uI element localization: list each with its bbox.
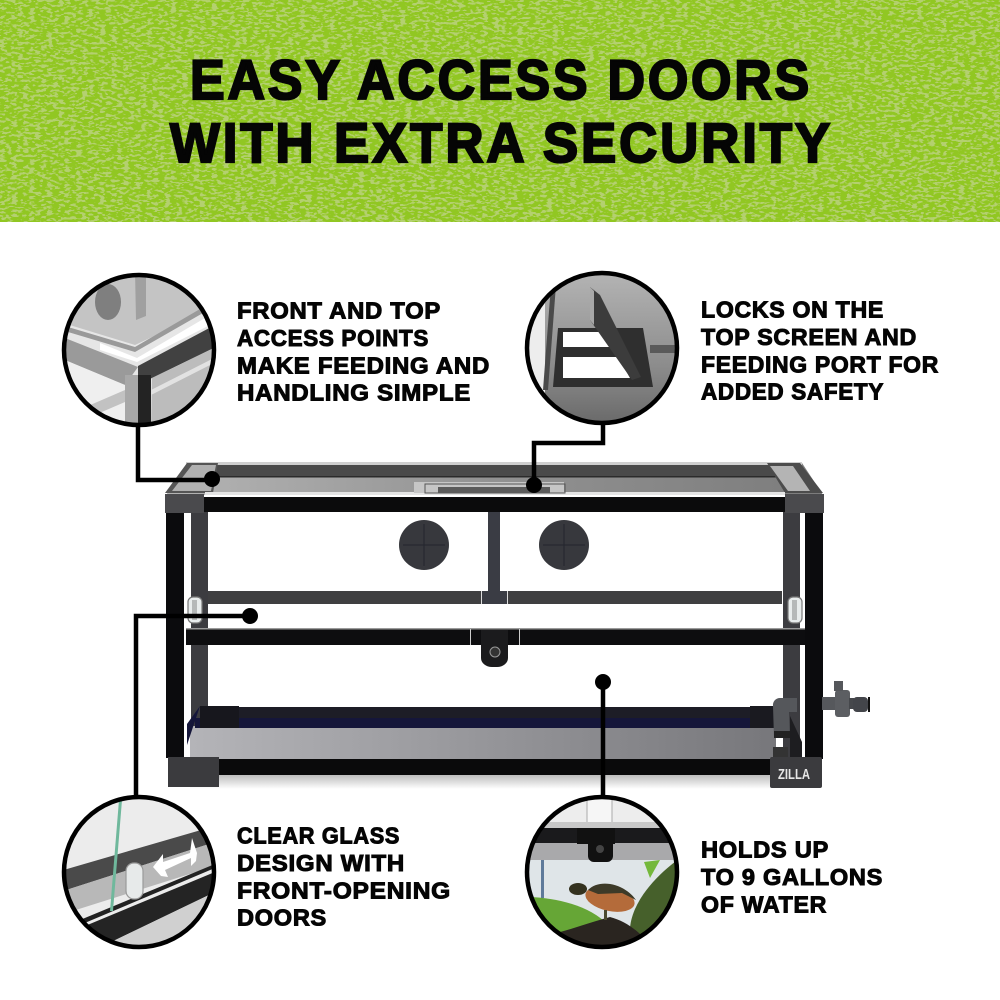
title: EASY ACCESS DOORS: [190, 48, 812, 111]
vent discs: [399, 520, 449, 570]
leader line: top access: [138, 425, 220, 487]
text block: locks: FEEDING PORT FOR: [701, 352, 939, 378]
middle front bar: [186, 629, 806, 645]
bottom front bar: [219, 759, 771, 775]
glass floor: [190, 726, 776, 760]
text block: locks: [701, 296, 939, 404]
title: WITH EXTRA SECURITY: [170, 111, 833, 174]
turtle: [569, 882, 637, 920]
feeding port: [414, 482, 565, 493]
detail circle: turtle in water: [525, 795, 680, 950]
bottom left corner: [168, 757, 219, 787]
leader line: locks: [526, 425, 603, 493]
text block: front and top access: FRONT AND TOP: [237, 298, 441, 324]
text block: front and top access: HANDLING SIMPLE: [237, 380, 471, 406]
title: [170, 48, 833, 174]
detail circle: feeding port: [525, 270, 680, 430]
ZILLA base corner: ZILLA: [778, 767, 810, 783]
text block: front and top access: ACCESS POINTS: [237, 325, 429, 351]
leader line: glass doors: [136, 608, 258, 800]
green header banner: [0, 0, 1000, 222]
plumbing valve: [822, 681, 870, 717]
glass edge: [110, 800, 122, 911]
top screen: [166, 463, 823, 495]
top corners: [165, 494, 204, 513]
floor shadow: [190, 775, 775, 789]
text block: front and top access: [237, 298, 490, 406]
text block: water capacity: [701, 836, 883, 918]
door latch: [481, 630, 508, 667]
right top corner: [767, 463, 823, 493]
text block: clear glass: DOORS: [237, 904, 327, 930]
text block: clear glass: FRONT-OPENING: [237, 878, 451, 904]
back posts: [191, 512, 208, 758]
gravel: [560, 917, 640, 945]
text block: locks: LOCKS ON THE: [701, 296, 884, 322]
terrarium product illustration: [165, 462, 870, 789]
door handles: [188, 597, 202, 623]
handle: [126, 863, 143, 899]
detail circle: top corner: [60, 270, 220, 435]
text block: front and top access: MAKE FEEDING AND: [237, 352, 490, 378]
substrate rail: [200, 707, 770, 718]
plants: [644, 860, 660, 878]
leader line: water: [595, 674, 611, 800]
text block: water capacity: OF WATER: [701, 892, 827, 918]
upper back rail: [208, 591, 782, 604]
arrow: [153, 838, 197, 877]
text block: locks: TOP SCREEN AND: [701, 324, 917, 350]
front posts: [166, 512, 184, 758]
top front bar: [204, 497, 786, 512]
text block: water capacity: HOLDS UP: [701, 836, 829, 862]
detail circle: sliding door: [60, 795, 220, 950]
text block: clear glass: DESIGN WITH: [237, 850, 405, 876]
center divider: [488, 512, 500, 592]
text block: water capacity: TO 9 GALLONS: [701, 864, 883, 890]
ZILLA base corner: [770, 757, 822, 788]
text block: clear glass: [237, 822, 451, 930]
left top corner: [165, 463, 218, 493]
text block: locks: ADDED SAFETY: [701, 378, 884, 404]
text block: clear glass: CLEAR GLASS: [237, 822, 400, 848]
plumbing elbow: [773, 698, 802, 758]
